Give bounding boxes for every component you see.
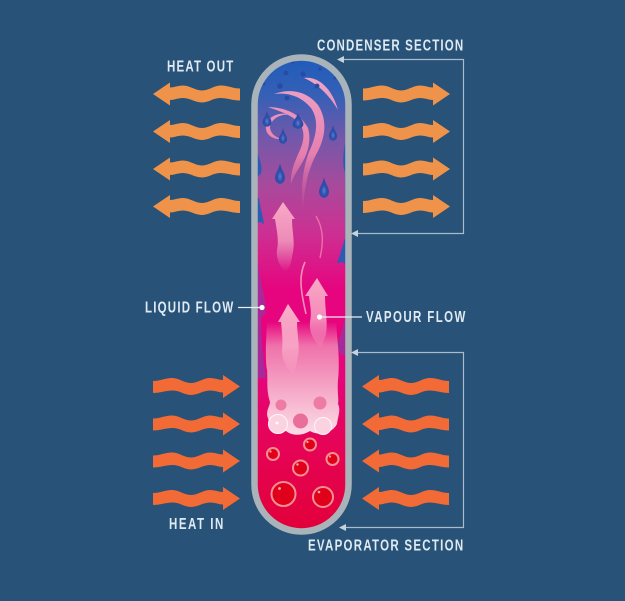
pipe wall <box>254 58 348 532</box>
label: condenser section: CONDENSER SECTION <box>317 36 463 54</box>
label: liquid flow: LIQUID FLOW <box>145 298 234 316</box>
label: vapour flow: VAPOUR FLOW <box>366 307 466 325</box>
vapour flow leader <box>317 314 362 320</box>
purple liquid flow <box>256 262 347 378</box>
arrows: condenser heat leaving right <box>363 82 450 218</box>
label: heat out: HEAT OUT <box>167 57 234 75</box>
liquid on walls <box>256 135 347 265</box>
thin vapour wisps <box>316 216 322 258</box>
interior details <box>256 60 347 507</box>
condenser bracket <box>337 56 464 237</box>
liquid flow leader <box>238 305 265 310</box>
arrows: heat out <box>153 82 240 218</box>
condensate drops <box>262 60 337 198</box>
upward vapour arrows <box>272 202 328 375</box>
evaporator bracket <box>339 349 464 531</box>
bubbles in vapour <box>268 396 332 434</box>
heat pipe <box>254 57 349 532</box>
arrows: heat in right <box>362 375 449 510</box>
label: heat in: HEAT IN <box>169 514 223 532</box>
pale vapour region <box>266 322 339 435</box>
arrows: heat in left <box>153 375 240 510</box>
vapour swirls <box>266 78 338 208</box>
label: evaporator section: EVAPORATOR SECTION <box>308 536 463 554</box>
pipe interior gradient <box>254 57 349 532</box>
bubbles in liquid <box>267 438 338 507</box>
